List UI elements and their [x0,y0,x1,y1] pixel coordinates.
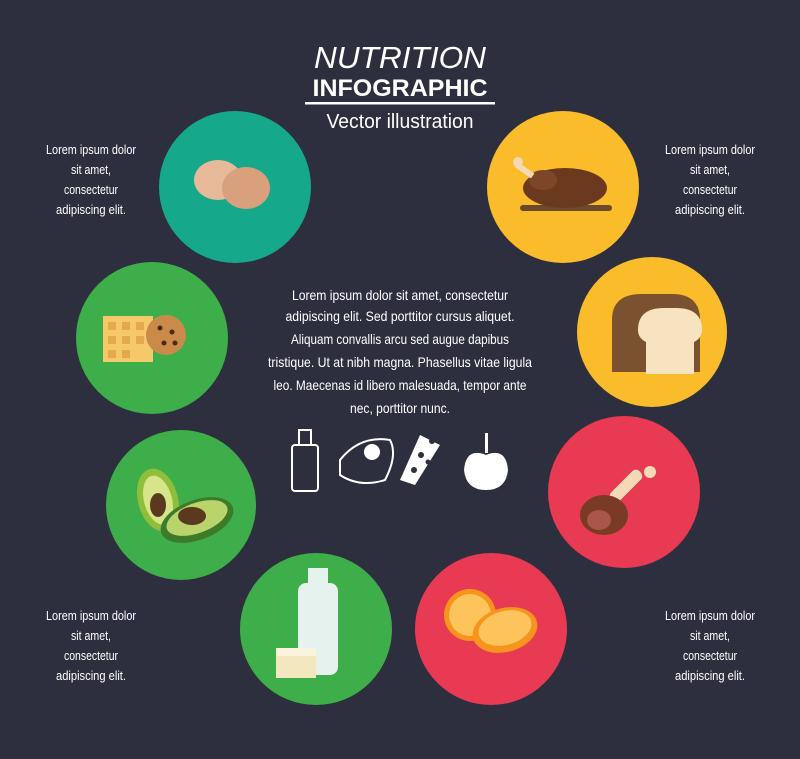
icon: eggs [194,160,270,209]
text block: top right: Lorem ipsum dolor [665,142,756,157]
circle: cookies [76,262,228,414]
icon: biscuit and cookie [103,315,186,362]
text block: bottom right: consectetur [683,648,738,663]
text block: top left: consectetur [64,182,119,197]
text block: bottom right: adipiscing elit. [675,668,745,683]
text block: top right [665,142,756,217]
circle: orange [415,553,567,705]
icon: bottle outline [292,430,318,491]
text block: top left: sit amet, [71,162,111,177]
circle: milk [240,553,392,705]
text block: top right: consectetur [683,182,738,197]
title: NUTRITION [314,40,487,75]
center paragraph: tristique. Ut at nibh magna. Phasellus vitae ligula [268,354,532,370]
circle: avocado [106,430,256,580]
icon: roast turkey [513,157,612,211]
icon: orange halves [444,589,543,660]
icon: avocado [130,464,240,552]
title [305,40,495,133]
text block: top left: adipiscing elit. [56,202,126,217]
center paragraph: leo. Maecenas id libero malesuada, tempor ante [274,377,527,393]
icon: milk bottle and carton [276,568,338,678]
icon: ham leg [580,466,656,535]
center paragraph: nec, porttitor nunc. [350,400,450,416]
text block: top right: adipiscing elit. [675,202,745,217]
icon: cheese [400,435,440,485]
text block: bottom left: consectetur [64,648,119,663]
text block: bottom right: Lorem ipsum dolor [665,608,756,623]
text block: bottom right: sit amet, [690,628,730,643]
text block: top right: sit amet, [690,162,730,177]
title: INFOGRAPHIC [312,75,488,102]
text block: bottom left: sit amet, [71,628,111,643]
circle: turkey [487,111,639,263]
text block: bottom left: Lorem ipsum dolor [46,608,137,623]
center paragraph [268,287,532,416]
circle: bread [577,257,727,407]
text block: top left: Lorem ipsum dolor [46,142,137,157]
center paragraph: adipiscing elit. Sed porttitor cursus aliquet. [286,308,514,324]
circle: meat leg [548,416,700,568]
center paragraph: Lorem ipsum dolor sit amet, consectetur [292,287,508,303]
text block: bottom left: adipiscing elit. [56,668,126,683]
circle: eggs [159,111,311,263]
title: Vector illustration [326,111,474,133]
text block: bottom right [665,608,756,683]
icon: steak outline [340,439,393,483]
icon: apple [464,433,508,490]
text block: top left [46,142,137,217]
text block: bottom left [46,608,137,683]
icon: bread [612,294,702,374]
center paragraph: Aliquam convallis arcu sed augue dapibus [291,331,509,347]
